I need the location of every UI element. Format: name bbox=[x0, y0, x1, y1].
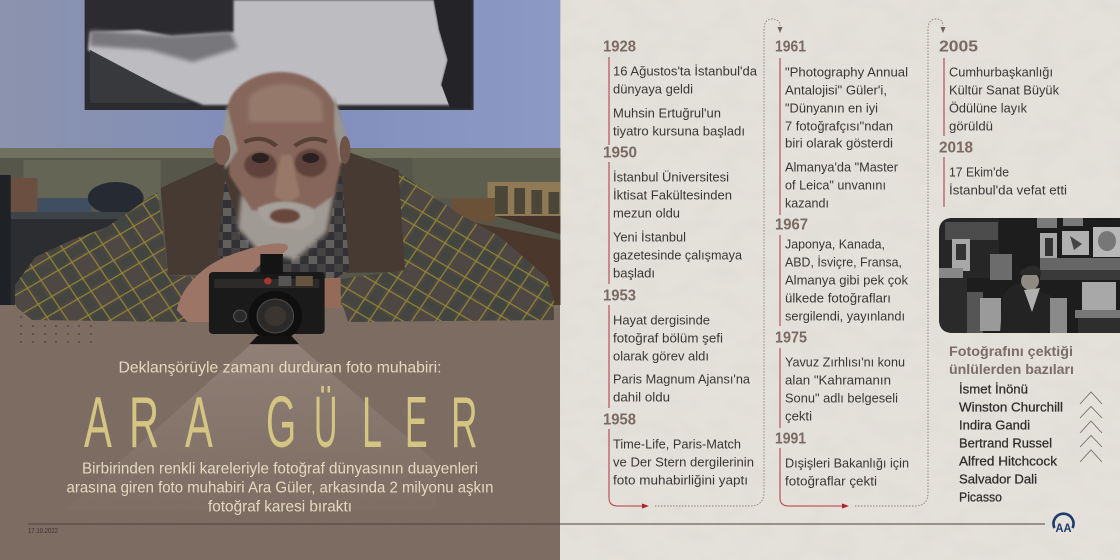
icon: AA agency logo bbox=[1054, 514, 1074, 535]
entry 1991: fotoğraflar çekti bbox=[785, 474, 877, 488]
entry 1975: 1975 bbox=[775, 330, 807, 346]
entry 1961: 1961 bbox=[775, 38, 806, 56]
entry 1953: olarak görev aldı bbox=[613, 348, 709, 364]
list: famous people: Salvador Dali bbox=[959, 472, 1037, 486]
title: ARA GÜLER: Ü bbox=[314, 381, 337, 462]
list: famous people: İsmet İnönü bbox=[959, 382, 1028, 396]
title: ARA GÜLER: A bbox=[84, 383, 112, 463]
date: 17.10.2022 bbox=[28, 526, 58, 535]
background furniture right bbox=[452, 182, 560, 305]
entry 1961: biri olarak gösterdi bbox=[785, 136, 893, 150]
entry 1950: Yeni İstanbul bbox=[613, 230, 686, 244]
man: scarf bbox=[217, 165, 349, 270]
entry 1928: 1928 bbox=[603, 38, 636, 56]
list: famous people bbox=[959, 382, 1063, 504]
entry 1975 bbox=[775, 330, 905, 428]
entry 1950: İktisat Fakültesinden bbox=[613, 188, 732, 202]
entry 2018 bbox=[939, 140, 1067, 207]
entry 1961: "Dünyanın en iyi bbox=[785, 100, 878, 116]
entry 1975: Sonu" adlı belgeseli bbox=[785, 390, 898, 406]
light cone from lens bbox=[66, 345, 436, 510]
man: hand bbox=[177, 243, 288, 322]
dot grid decoration bbox=[20, 316, 92, 343]
entry 1958: ve Der Stern dergilerinin bbox=[613, 454, 754, 470]
list: famous people: Picasso bbox=[959, 490, 1002, 504]
panel: portrait photo of Ara Güler bbox=[0, 0, 560, 344]
entry 1967: sergilendi, yayınlandı bbox=[785, 308, 905, 324]
entry 1953: fotoğraf bölüm şefi bbox=[613, 330, 723, 346]
framed artwork on wall bbox=[85, 0, 474, 110]
title: ARA GÜLER: R bbox=[129, 383, 159, 463]
entry 1961: Antalojisi" Güler'i, bbox=[785, 82, 887, 98]
entry 1950 bbox=[603, 144, 743, 284]
timeline column 2 bbox=[775, 38, 909, 497]
entry 2005: Cumhurbaşkanlığı bbox=[949, 64, 1053, 80]
intro paragraph: fotoğraf karesi bıraktı bbox=[208, 498, 352, 516]
entry 2018: İstanbul'da vefat etti bbox=[949, 182, 1067, 198]
entry 1950: mezun oldu bbox=[613, 206, 680, 220]
title: ARA GÜLER: R bbox=[451, 383, 478, 463]
entry 1958: foto muhabirliğini yaptı bbox=[613, 472, 748, 488]
title: ARA GÜLER bbox=[84, 381, 478, 463]
entry 2005: 2005 bbox=[939, 38, 978, 56]
entry 1958: 1958 bbox=[603, 412, 636, 428]
timeline connector: column 2 to 3 bbox=[780, 19, 946, 508]
heading: famous people photographed: Fotoğrafını çektiği bbox=[949, 343, 1073, 359]
entry 1928: tiyatro kursuna başladı bbox=[613, 124, 745, 138]
title: ARA GÜLER: G bbox=[266, 384, 296, 463]
entry 1950: başladı bbox=[613, 266, 655, 280]
entry 1961: kazandı bbox=[785, 196, 829, 210]
entry 2005 bbox=[939, 38, 1059, 136]
list: famous people: Winston Churchill bbox=[959, 400, 1063, 414]
entry 2005: Kültür Sanat Büyük bbox=[949, 82, 1059, 98]
entry 1928: Muhsin Ertuğrul'un bbox=[613, 106, 721, 120]
entry 1991 bbox=[775, 430, 909, 497]
intro paragraph: arasına giren foto muhabiri Ara Güler, arkasında 2 milyonu aşkın bbox=[66, 480, 494, 496]
heading: famous people photographed bbox=[949, 343, 1074, 377]
entry 1975: Yavuz Zırhlısı'nı konu bbox=[785, 354, 905, 370]
entry 2005: Ödülüne layık bbox=[949, 100, 1027, 116]
intro paragraph: Birbirinden renkli kareleriyle fotoğraf dünyasının duayenleri bbox=[82, 460, 478, 478]
icon: AA agency logo: AA bbox=[1056, 521, 1072, 535]
entry 1967: ABD, İsviçre, Fransa, bbox=[785, 254, 902, 270]
list: famous people: Alfred Hitchcock bbox=[959, 454, 1058, 468]
entry 1961 bbox=[775, 38, 908, 215]
title: ARA GÜLER: E bbox=[405, 382, 428, 462]
man: left sleeve bbox=[15, 192, 209, 322]
entry 1928: 16 Ağustos'ta İstanbul'da bbox=[613, 64, 758, 78]
entry 1953: Paris Magnum Ajansı'na bbox=[613, 372, 751, 386]
entry 1950: 1950 bbox=[603, 144, 637, 162]
list: famous people: Bertrand Russel bbox=[959, 436, 1052, 450]
entry 2018: 2018 bbox=[939, 140, 973, 156]
entry 1967 bbox=[775, 216, 908, 326]
man: vest bbox=[161, 150, 407, 275]
entry 1950: İstanbul Üniversitesi bbox=[613, 170, 729, 184]
entry 1991: 1991 bbox=[775, 430, 806, 448]
timeline column 1 bbox=[603, 38, 758, 497]
wainscot wall panelling bbox=[0, 148, 560, 305]
title: ARA GÜLER: L bbox=[362, 382, 382, 463]
entry 1975: alan "Kahramanın bbox=[785, 372, 891, 388]
man: right sleeve bbox=[334, 172, 554, 322]
entry 1928 bbox=[603, 38, 758, 145]
entry 1967: 1967 bbox=[775, 216, 808, 234]
entry 1953: 1953 bbox=[603, 288, 636, 304]
entry 1967: Almanya gibi pek çok bbox=[785, 272, 908, 288]
entry 1961: Almanya'da "Master bbox=[785, 160, 899, 174]
entry 1958: Time-Life, Paris-Match bbox=[613, 436, 741, 452]
entry 1928: dünyaya geldi bbox=[613, 82, 693, 96]
title: ARA GÜLER: A bbox=[185, 383, 213, 463]
man: head and beard bbox=[213, 72, 350, 260]
entry 1967: Japonya, Kanada, bbox=[785, 236, 885, 252]
entry 2018: 17 Ekim'de bbox=[949, 164, 1009, 180]
list: famous people: Indira Gandi bbox=[959, 418, 1030, 432]
background furniture left bbox=[0, 175, 144, 305]
entry 1950: gazetesinde çalışmaya bbox=[613, 248, 743, 262]
entry 1961: 7 fotoğrafçısı"ndan bbox=[785, 118, 893, 134]
entry 1967: ülkede fotoğrafları bbox=[785, 290, 891, 306]
entry 1953 bbox=[603, 288, 751, 408]
timeline column 3 bbox=[939, 38, 1067, 207]
entry 1953: dahil oldu bbox=[613, 390, 670, 404]
photo: Ara Güler in his archive bbox=[939, 218, 1120, 333]
timeline connector: column 1 to 2 bbox=[609, 19, 782, 508]
entry 2005: görüldü bbox=[949, 118, 993, 134]
footer rule bbox=[28, 523, 1045, 525]
subtitle: Deklanşörüyle zamanı durduran foto muhabiri: bbox=[118, 360, 442, 376]
panel: table and title background bbox=[0, 305, 560, 560]
entry 1991: Dışişleri Bakanlığı için bbox=[785, 456, 909, 470]
heading: famous people photographed: ünlülerden bazıları bbox=[949, 361, 1074, 377]
entry 1953: Hayat dergisinde bbox=[613, 312, 710, 328]
camera bbox=[209, 254, 325, 344]
icon: stacked chevrons bbox=[1080, 392, 1102, 462]
entry 1961: of Leica" unvanını bbox=[785, 178, 886, 192]
intro paragraph bbox=[66, 460, 494, 516]
entry 1961: "Photography Annual bbox=[785, 64, 908, 80]
entry 1958 bbox=[603, 412, 754, 497]
entry 1975: çekti bbox=[785, 408, 812, 424]
